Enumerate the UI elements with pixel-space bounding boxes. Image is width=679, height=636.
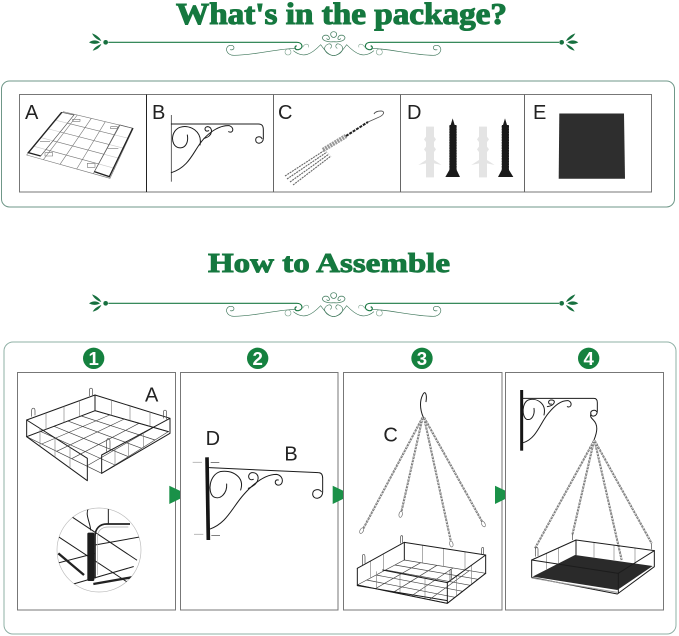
- basket drawing A: A: [145, 385, 159, 407]
- badge 3: 3: [417, 348, 427, 369]
- badge 2: 2: [252, 348, 263, 369]
- hanging chain C: C: [383, 425, 398, 447]
- mounted bracket: [522, 390, 597, 451]
- item A: grid mat: [25, 102, 133, 178]
- item E: black pad: E: [533, 102, 546, 124]
- detail circle: [57, 508, 142, 592]
- step 1 box: [18, 348, 176, 610]
- divider ornament middle: [89, 293, 578, 317]
- divider ornament top: [89, 32, 578, 56]
- basket: [357, 536, 486, 603]
- item D: anchors and screws: D: [407, 102, 421, 124]
- step 2 box: [180, 348, 338, 610]
- bracket drawing with screws: [193, 428, 323, 540]
- bracket drawing with screws: B: [284, 444, 298, 466]
- hanging chain C: [359, 393, 486, 547]
- anchors: [418, 127, 495, 177]
- badge 1: [83, 348, 104, 369]
- item C: chain with hook: [278, 102, 384, 185]
- basket drawing A: [27, 385, 170, 481]
- badge 2: [247, 348, 268, 369]
- item B: wall bracket: [152, 102, 263, 182]
- item A: grid mat: A: [25, 102, 39, 124]
- item C: chain with hook: C: [278, 102, 292, 124]
- arrow 3: [495, 486, 514, 504]
- panel: package contents: [2, 81, 674, 207]
- badge 4: 4: [583, 348, 594, 369]
- bracket drawing with screws: D: [206, 428, 220, 450]
- screws: [445, 118, 513, 177]
- arrow 2: [333, 486, 352, 504]
- badge 1: 1: [88, 348, 99, 369]
- item B: wall bracket: B: [152, 102, 165, 124]
- panel: assembly steps: [4, 342, 676, 634]
- heading: how to assemble: How to Assemble: [208, 248, 450, 278]
- item D: anchors and screws: [407, 102, 513, 177]
- hanging basket with mat: [532, 441, 654, 594]
- badge 4: [578, 348, 599, 369]
- step 3 box: [344, 348, 502, 610]
- badge 3: [411, 348, 433, 369]
- arrow 1: [169, 486, 188, 504]
- step 4 box: [506, 348, 664, 610]
- item E: black pad: [533, 102, 625, 179]
